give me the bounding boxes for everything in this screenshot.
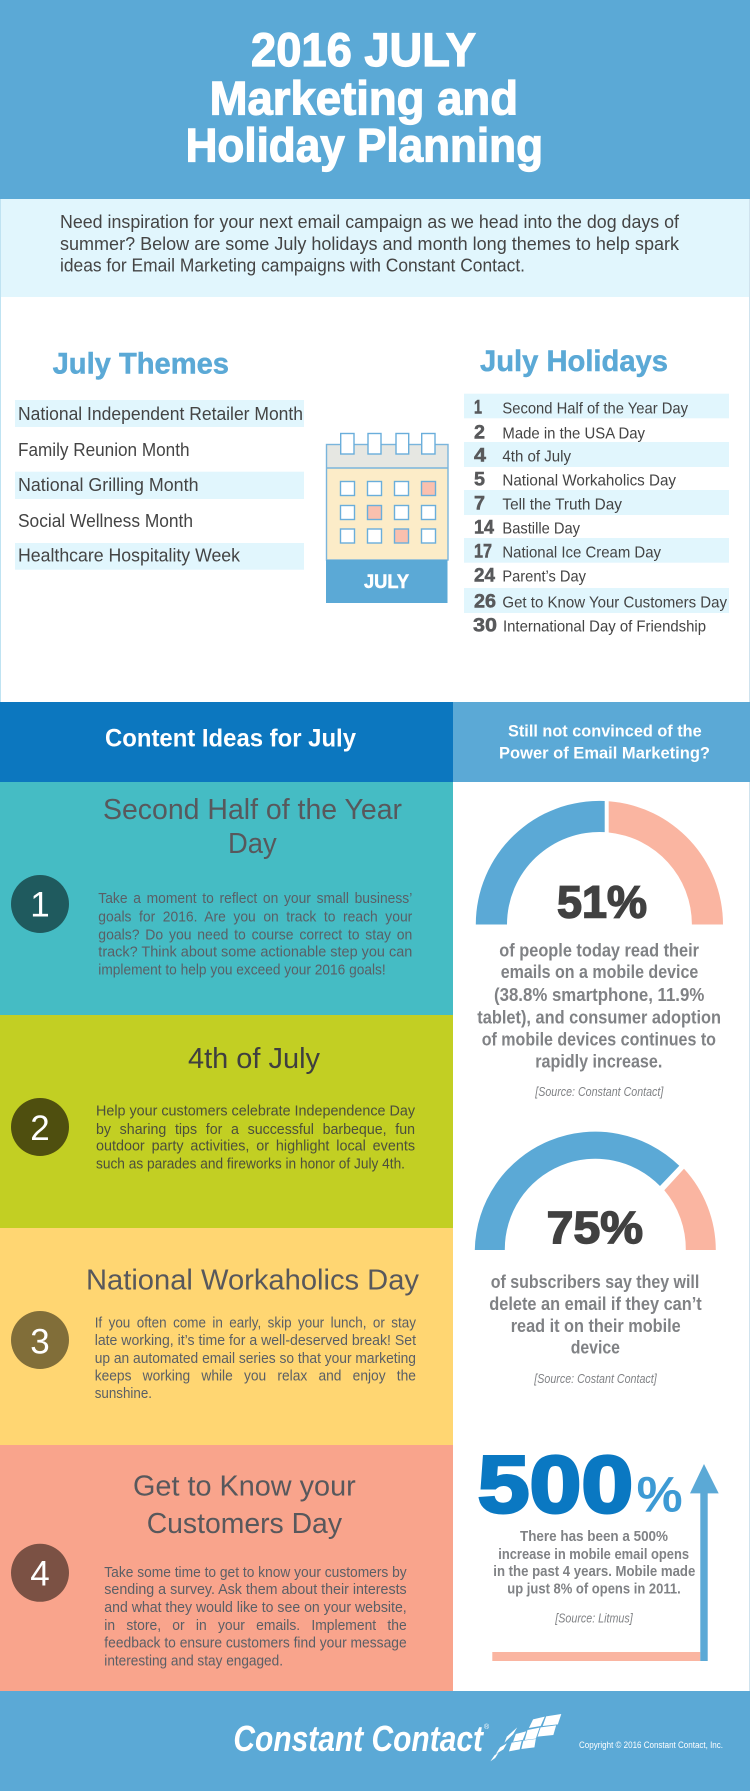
heading: Second Half of the Year Day: Second Half of the Year	[103, 794, 402, 826]
icon: number 2: 2	[30, 1109, 50, 1148]
icon: Constant Contact logo mark	[490, 1714, 561, 1761]
stat: 51% mobile readers: [Source: Constant Contact]	[534, 1085, 664, 1099]
heading band: Still not convinced	[453, 702, 750, 782]
heading band: Still not convinced: Power of Email Marketing?	[499, 744, 710, 762]
text block: idea 3 body: late working, it’s time for a well-deserved break! Set	[95, 1332, 417, 1349]
heading: Second Half of the Year Day: Day	[228, 828, 277, 860]
text block: idea 4 body: in store, or in your emails. Implement the	[104, 1617, 407, 1634]
text block: idea 4 body: feedback to ensure customers find your message	[104, 1634, 407, 1652]
logo: Constant Contact wordmark: ®	[484, 1723, 490, 1731]
stat: 75% delete emails	[475, 1132, 716, 1386]
text block: idea 3 body: sunshine.	[95, 1385, 152, 1402]
text block: idea 4 body: sending a survey. Ask them about their interests	[104, 1581, 407, 1598]
heading: Get to Know your Customers Day	[133, 1470, 356, 1540]
stat: 75% delete emails: [Source: Costant Contact]	[533, 1372, 657, 1386]
text block: 75% description: device	[571, 1337, 620, 1357]
title banner: Marketing and	[210, 71, 518, 124]
text block: idea 2 body: outdoor party activities, or highlight local events	[96, 1137, 415, 1154]
text block: idea 2 body: by sharing tips for a successful barbeque, fun	[96, 1121, 415, 1138]
panel: July holidays: 4th of July	[502, 449, 571, 466]
intro text panel: Need inspiration for your next email campaign as we head into the dog days of	[60, 212, 680, 232]
big number: 500%	[478, 1440, 683, 1530]
text block: 75% description: read it on their mobile	[511, 1316, 681, 1336]
text block: 500% description	[493, 1528, 695, 1598]
panel: idea 2	[0, 1015, 453, 1228]
panel: idea 3	[0, 1228, 453, 1445]
text block: 51% description: (38.8% smartphone, 11.9%	[494, 985, 704, 1005]
heading: National Workaholics Day: National Workaholics Day	[86, 1265, 419, 1297]
stat: 500% increase	[478, 1440, 719, 1661]
icon: number 4: 4	[30, 1554, 50, 1593]
panel: July holidays	[464, 345, 729, 637]
text block: idea 1 body: goals? Do you need to course correct to stay on	[98, 926, 412, 943]
heading band: Still not convinced: Still not convinced of the	[508, 722, 702, 740]
heading: Get to Know your Customers Day: Get to Know your	[133, 1470, 356, 1502]
panel: July holidays: 30	[473, 616, 497, 637]
text block: 51% description: emails on a mobile device	[501, 962, 698, 982]
icon: number 1: 1	[30, 886, 50, 924]
panel: July holidays: National Workaholics Day	[502, 473, 676, 490]
heading: Get to Know your Customers Day: Customers Day	[147, 1508, 342, 1540]
panel: July holidays: 2	[474, 422, 485, 443]
text block: idea 1 body	[98, 890, 412, 978]
panel: July themes: National Independent Retailer Month	[18, 404, 303, 424]
panel: idea 1	[0, 782, 453, 1015]
panel: July holidays: Tell the Truth Day	[502, 496, 622, 513]
panel: July holidays: 7	[474, 493, 485, 514]
text block: idea 3 body: up an automated email series so that your marketing	[95, 1350, 416, 1367]
text block: 75% description	[489, 1272, 702, 1357]
panel: July holidays: Made in the USA Day	[502, 425, 645, 442]
panel: July holidays: 17	[474, 541, 492, 562]
text block: idea 1 body: implement to help you exceed your 2016 goals!	[98, 961, 386, 978]
text block: idea 3 body	[95, 1314, 417, 1402]
panel: July holidays: 24	[474, 566, 495, 587]
panel: July holidays: 5	[474, 470, 485, 491]
arrow: upward growth	[492, 1464, 719, 1661]
text block: idea 1 body: goals for 2016. Are you on track to reach your	[98, 908, 412, 925]
text block: 500% description: increase in mobile email opens	[498, 1546, 689, 1563]
text block: 75% description: delete an email if they can’t	[489, 1294, 702, 1314]
title banner	[0, 0, 750, 199]
icon: number 3: 3	[30, 1322, 50, 1361]
panel: July themes: Family Reunion Month	[18, 440, 190, 460]
text block: idea 4 body: Take some time to get to know your customers by	[104, 1564, 407, 1581]
text block: 500% description: up just 8% of opens in 2011.	[507, 1581, 681, 1598]
panel: July holidays: International Day of Friendship	[503, 619, 706, 636]
icon: number 3	[11, 1311, 69, 1369]
big number: 500%: %	[637, 1466, 683, 1522]
heading: Second Half of the Year Day	[103, 794, 402, 860]
panel: July holidays: National Ice Cream Day	[502, 544, 661, 561]
panel: July themes: National Grilling Month	[18, 475, 198, 495]
text block: idea 4 body	[104, 1564, 407, 1669]
text block: 500% description: There has been a 500%	[520, 1528, 668, 1545]
stat: 51% mobile readers	[476, 801, 723, 1099]
heading: July Holidays: July Holidays	[480, 345, 668, 378]
panel: July themes	[15, 347, 304, 570]
text block: 51% description: tablet), and consumer adoption	[477, 1008, 721, 1028]
panel: July holidays: 26	[474, 591, 496, 612]
panel: July holidays: 1	[474, 397, 482, 418]
text block: idea 3 body: If you often come in early, skip your lunch, or stay	[95, 1314, 416, 1331]
heading: July Themes: July Themes	[53, 347, 229, 380]
panel: July themes: Social Wellness Month	[18, 511, 193, 531]
panel: July holidays: Get to Know Your Customers Day	[502, 594, 727, 611]
icon: July calendar: JULY	[364, 572, 409, 593]
icon: number 2	[11, 1098, 69, 1156]
panel: idea 4	[0, 1445, 453, 1691]
text block: idea 4 body: interesting and stay engaged.	[104, 1652, 283, 1669]
stat: 51% mobile readers: 51%	[557, 877, 647, 928]
title banner: Holiday Planning	[186, 118, 543, 171]
icon: number 4	[11, 1544, 69, 1602]
chart: 75% gauge	[475, 1132, 716, 1250]
intro text panel	[1, 199, 749, 297]
icon: number 1	[11, 875, 69, 933]
intro text panel: ideas for Email Marketing campaigns with Constant Contact.	[60, 256, 525, 276]
heading band: Content Ideas for July: Content Ideas for July	[105, 724, 356, 752]
panel: July holidays: Second Half of the Year Day	[502, 400, 688, 417]
text block: 51% description: rapidly increase.	[535, 1051, 662, 1071]
panel: July holidays: Bastille Day	[502, 520, 580, 537]
panel: July holidays: 4	[474, 446, 486, 467]
logo: Constant Contact wordmark: Constant Contact	[233, 1718, 485, 1759]
title banner: 2016 JULY	[251, 23, 476, 76]
text block: idea 1 body: Take a moment to reflect on your small business’	[98, 890, 412, 907]
big number: 500%: 500	[478, 1440, 633, 1530]
heading band: Content Ideas for July	[0, 702, 453, 782]
text block: 75% description: of subscribers say they will	[491, 1272, 699, 1292]
text block: 500% description: in the past 4 years. Mobile made	[493, 1563, 695, 1580]
stat: 75% delete emails: 75%	[547, 1202, 643, 1253]
text block: idea 2 body: such as parades and fireworks in honor of July 4th.	[96, 1155, 405, 1172]
text block: 51% description	[477, 940, 721, 1071]
text block: 51% description: of people today read their	[499, 940, 699, 960]
footer	[0, 1691, 750, 1791]
text block: idea 1 body: track? Think about some actionable step you can	[98, 944, 412, 960]
text block: idea 2 body: Help your customers celebrate Independence Day	[96, 1103, 415, 1120]
text block: idea 4 body: and what they would like to see on your website,	[104, 1599, 407, 1616]
heading: 4th of July: 4th of July	[188, 1043, 320, 1075]
stat: 500% increase: [Source: Litmus]	[554, 1611, 633, 1625]
intro text panel: summer? Below are some July holidays and month long themes to help spark	[60, 234, 680, 254]
icon: July calendar	[326, 434, 448, 603]
copyright line: Copyright © 2016 Constant Contact, Inc.	[579, 1740, 723, 1750]
panel: July holidays: 14	[474, 517, 494, 538]
text block: idea 2 body	[96, 1103, 415, 1172]
panel: July themes: Healthcare Hospitality Week	[18, 546, 241, 566]
text block: 51% description: of mobile devices continues to	[482, 1029, 716, 1049]
panel: July holidays: Parent’s Day	[502, 569, 586, 586]
text block: idea 3 body: keeps working while you relax and enjoy the	[95, 1367, 416, 1384]
chart: 51% gauge	[476, 801, 723, 924]
